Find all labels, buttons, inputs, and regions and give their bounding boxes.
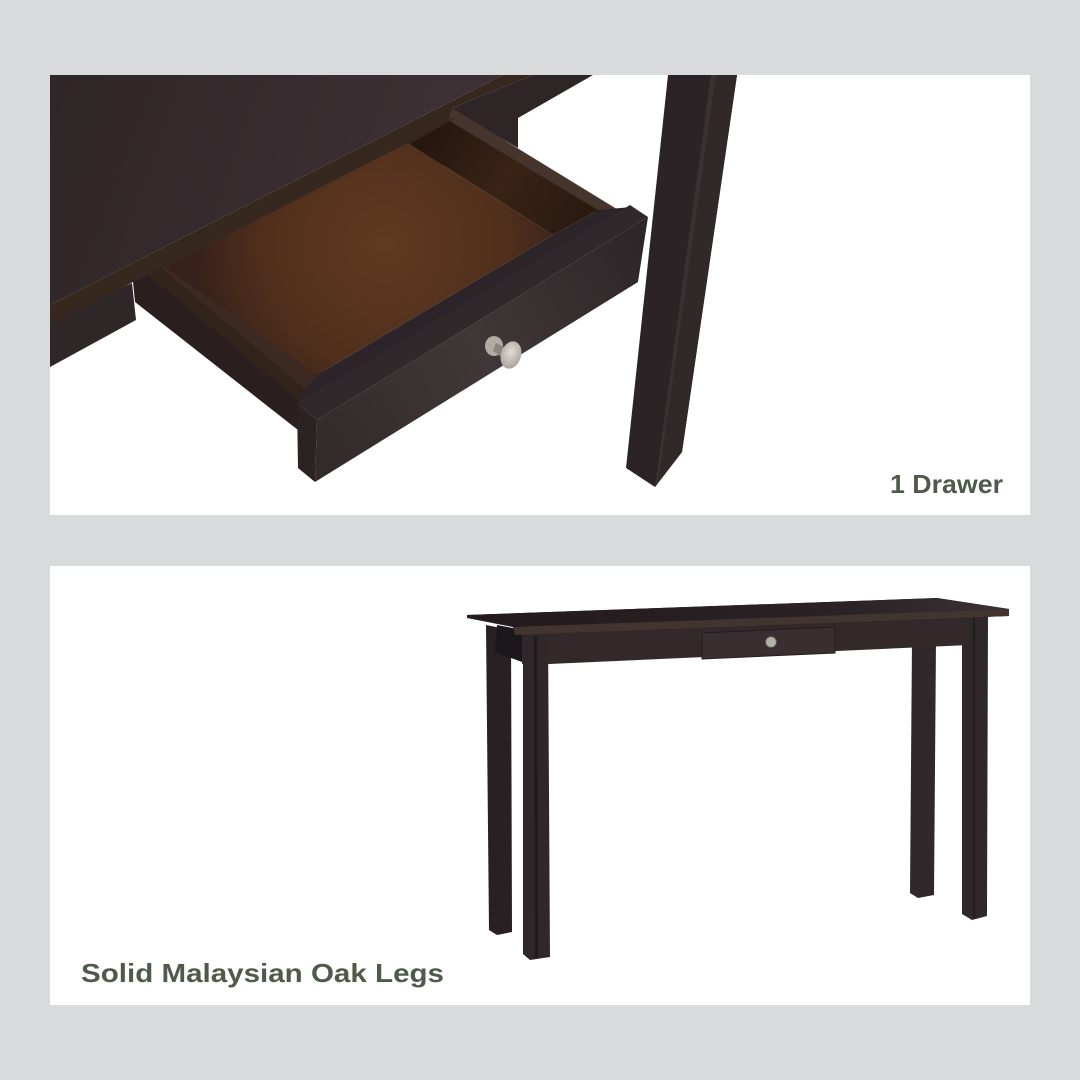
back left leg [486, 625, 512, 935]
icon: drawer knob [485, 336, 525, 371]
panel: drawer close-up [50, 75, 1030, 515]
label: 1 Drawer: 1 Drawer [890, 469, 1003, 499]
photo: console table [467, 598, 1009, 960]
back right leg [910, 640, 936, 898]
photo: open drawer and table underside [50, 75, 737, 487]
front apron [522, 612, 969, 664]
table top [467, 598, 1009, 635]
front left leg [523, 628, 550, 960]
label: Solid Malaysian Oak Legs: Solid Malaysian Oak Legs [81, 958, 444, 988]
side apron [495, 625, 523, 662]
drawer front [702, 627, 835, 659]
table leg [626, 75, 737, 487]
panel: full table [50, 566, 1030, 1005]
front right leg [962, 615, 988, 920]
icon: small knob [766, 636, 776, 648]
